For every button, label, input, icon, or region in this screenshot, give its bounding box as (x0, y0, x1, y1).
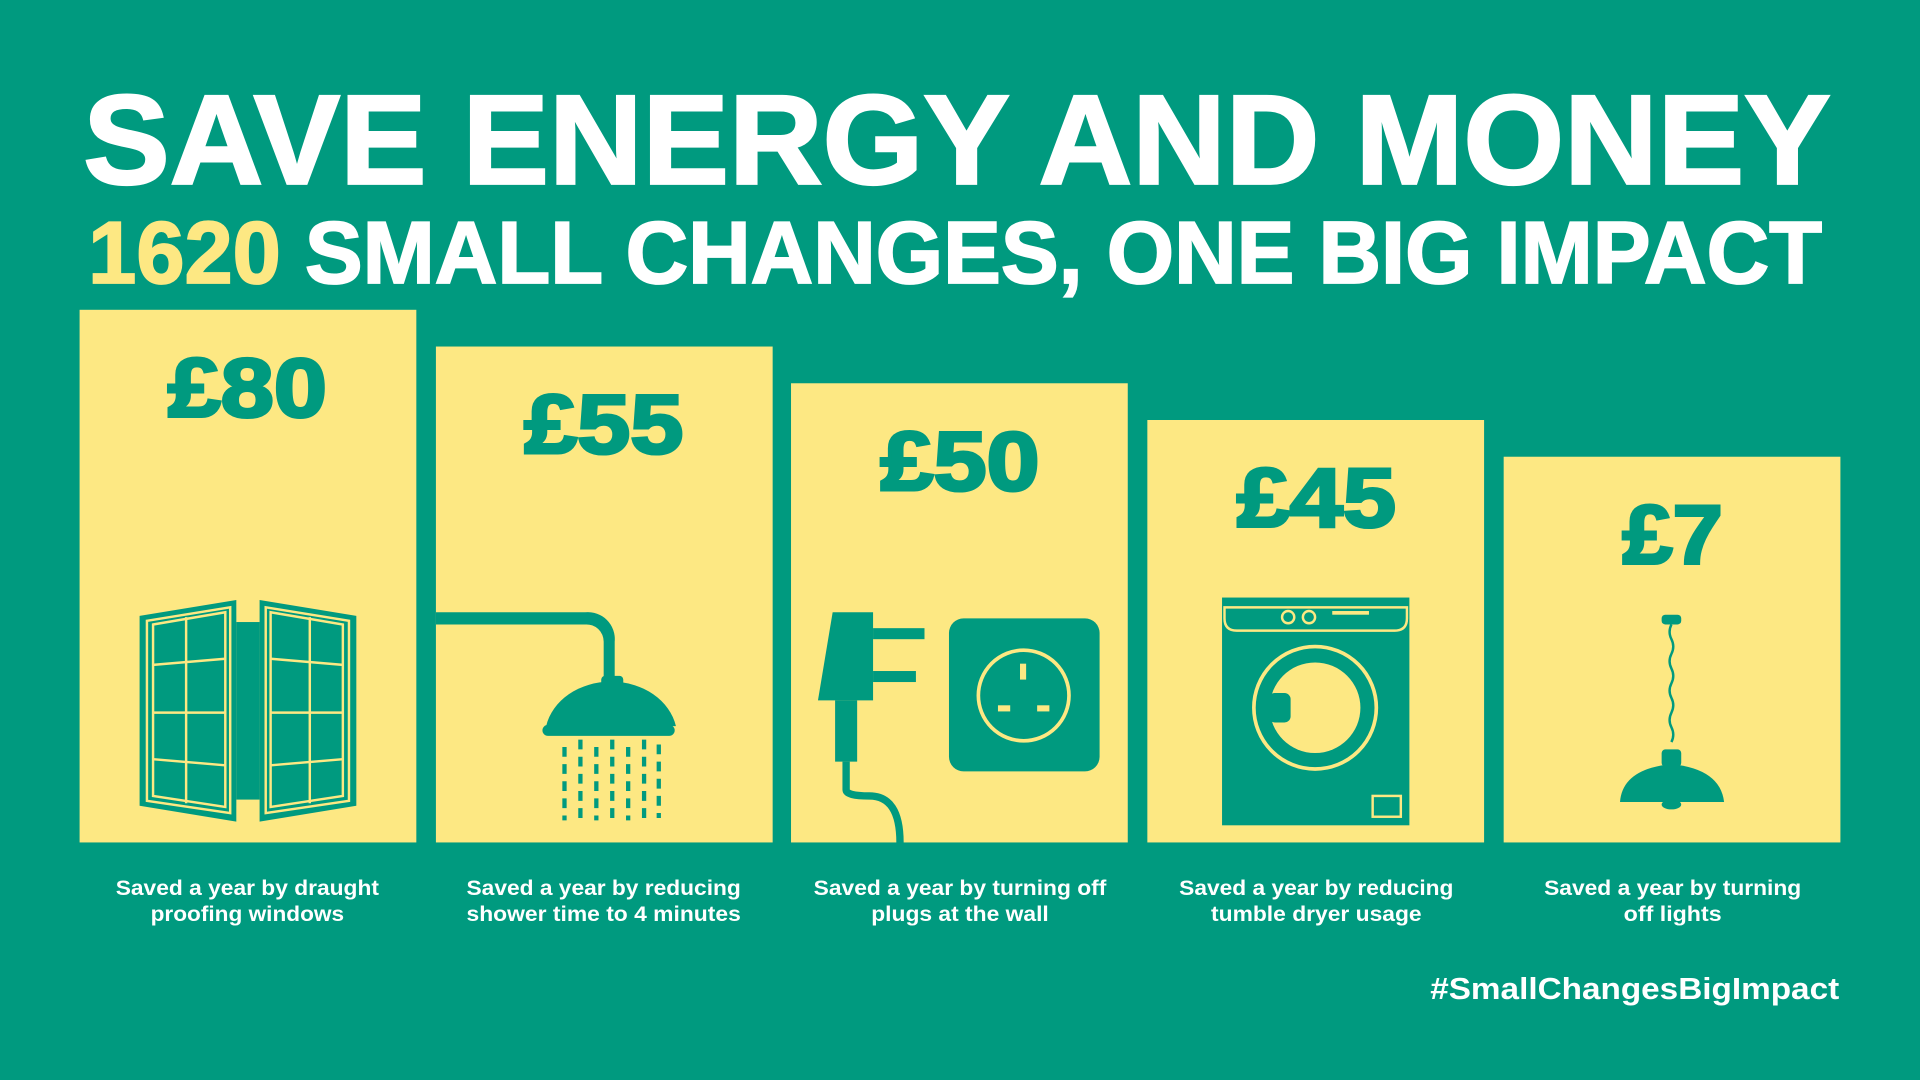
panel: plugs £50 (791, 383, 1128, 926)
caption: tumble dryer usage (1211, 902, 1422, 926)
caption: Saved a year by reducing (467, 876, 741, 900)
caption (467, 876, 741, 926)
panel: lights £7 (1504, 457, 1840, 926)
caption (116, 876, 379, 926)
caption: Saved a year by reducing (1179, 876, 1453, 900)
title: SAVE ENERGY AND MONEY (83, 69, 1831, 211)
icon: plug and socket (818, 612, 1100, 842)
panel: plugs £50: £50 (880, 415, 1040, 508)
panel: lights £7: £7 (1622, 488, 1723, 581)
caption: shower time to 4 minutes (467, 902, 741, 926)
icon: washing machine (1222, 598, 1409, 825)
caption (1179, 876, 1453, 926)
caption: off lights (1624, 902, 1722, 926)
caption (1544, 876, 1801, 926)
icon: shower (436, 612, 676, 820)
caption: Saved a year by turning off (814, 876, 1107, 900)
panel: shower £55: £55 (524, 378, 683, 471)
caption: Saved a year by turning (1544, 876, 1801, 900)
panel: window £80 (80, 310, 416, 926)
icon: pendant lamp (1620, 615, 1724, 809)
icon: window (140, 600, 356, 822)
caption: proofing windows (151, 902, 344, 926)
caption: Saved a year by draught (116, 876, 379, 900)
caption: plugs at the wall (871, 902, 1049, 926)
panel: tumble dryer £45 (1147, 420, 1484, 926)
subtitle: 1620 SMALL CHANGES, ONE BIG IMPACT (88, 203, 1822, 302)
panel: tumble dryer £45: £45 (1237, 452, 1396, 545)
panel: shower £55 (436, 347, 773, 926)
panel: window £80: £80 (168, 341, 327, 434)
caption (814, 876, 1107, 926)
hashtag: #SmallChangesBigImpact (1430, 972, 1839, 1006)
